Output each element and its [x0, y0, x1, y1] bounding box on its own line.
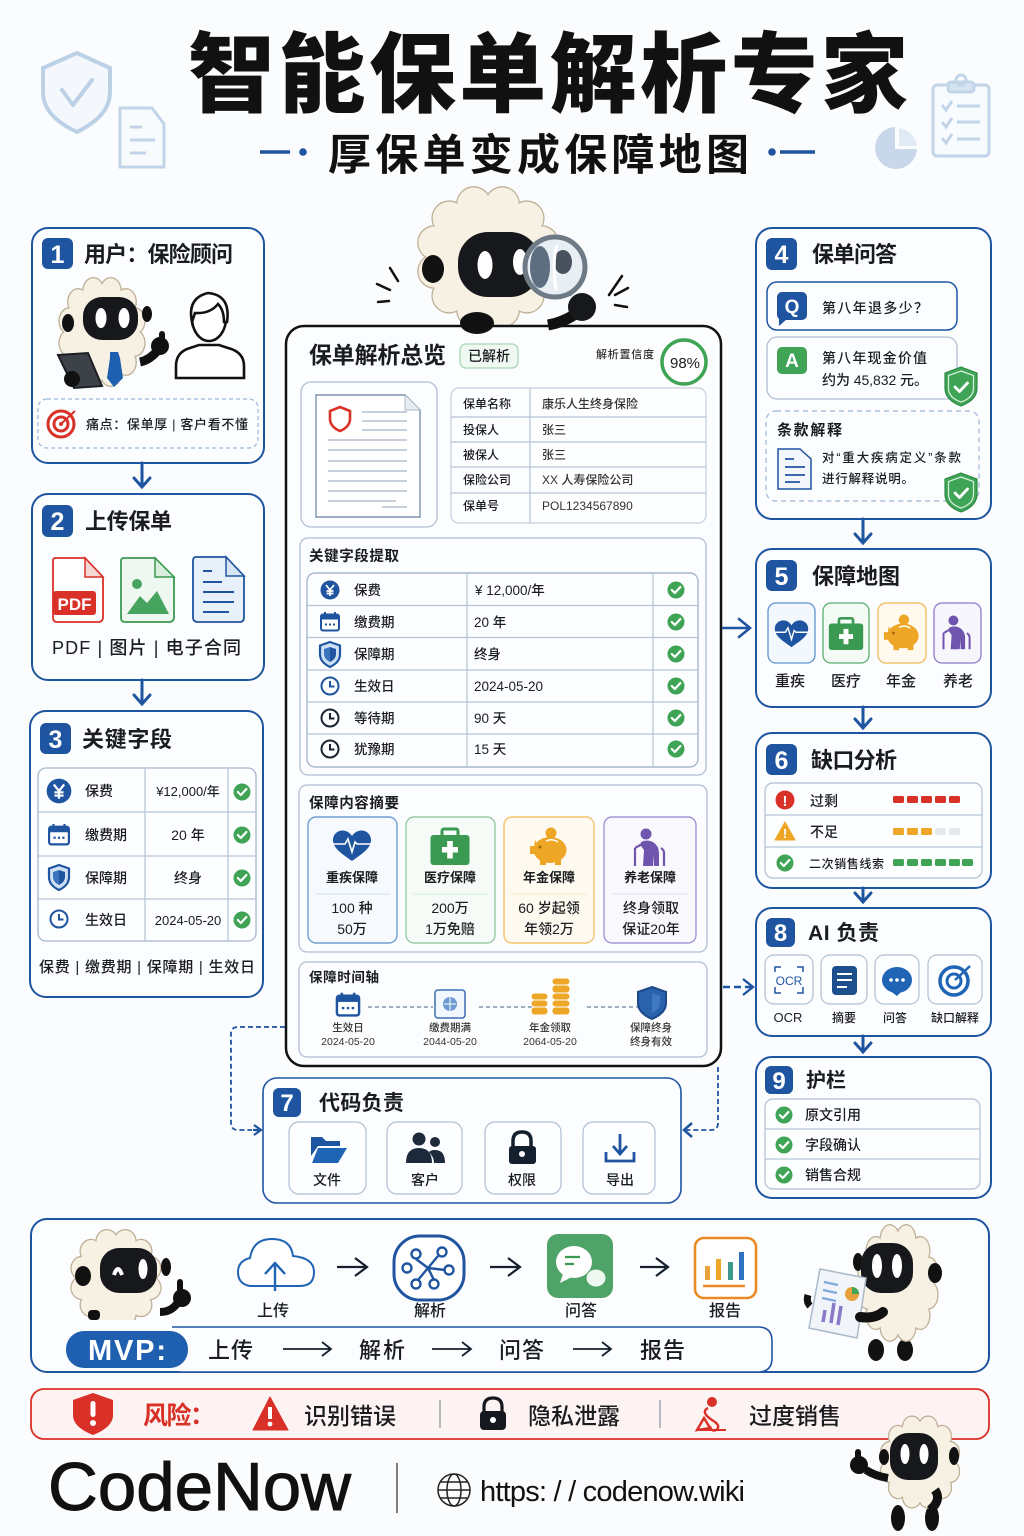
sub-panel: coverage summary: 保障内容摘要: [309, 794, 399, 812]
tile: permissions: [485, 1122, 561, 1194]
risk: privacy leak: [480, 1398, 620, 1430]
subtitle: 厚保单变成保障地图: [328, 132, 749, 180]
question bubble: 第八年退多少？: [822, 300, 928, 316]
icon: image file: [121, 558, 174, 622]
heading 5: 保障地图: [812, 564, 900, 589]
label Q&A: 问答: [565, 1302, 597, 1320]
panel: policy overview: [286, 326, 721, 1066]
sub-panel: coverage summary: [299, 785, 707, 952]
sub-panel: key field extraction: ¥ 12,000/年: [474, 582, 545, 598]
sub-panel: key field extraction: 90 天: [474, 711, 507, 726]
card: medical: [406, 817, 495, 943]
sub-panel: key field extraction: 生效日: [354, 678, 394, 694]
answer bubble: A: [785, 351, 799, 372]
card: critical illness: 50万: [337, 921, 367, 937]
status badge: [460, 344, 518, 368]
title: 智能保单解析专家: [188, 27, 908, 124]
policy info table: POL1234567890: [542, 499, 633, 513]
heading 9: 护栏: [806, 1069, 846, 1092]
arrow: [337, 1258, 367, 1276]
sub-panel: coverage timeline: 保障终身: [630, 1021, 672, 1034]
decorative header icon: document: [120, 108, 164, 167]
dashed connector overview to panel 7 left: [231, 1027, 285, 1135]
arrow: [490, 1258, 520, 1276]
question bubble: [767, 282, 957, 330]
card: annuity: 年金保障: [523, 870, 575, 885]
heading 8: AI 负责: [808, 922, 879, 945]
MVP pill: MVP:: [88, 1335, 166, 1367]
arrow head into panel 7: [684, 1123, 692, 1137]
panel 8: AI responsibilities: [756, 908, 991, 1036]
tile: export: [583, 1122, 655, 1194]
badge 2: 2: [51, 508, 64, 536]
sub-panel: coverage timeline: [299, 962, 707, 1057]
sub-panel: key field extraction: 保障期: [354, 646, 394, 662]
AI tile labels: 摘要: [832, 1010, 856, 1025]
decorative header icon: pie chart: [875, 127, 917, 169]
AI tile labels: [774, 1010, 979, 1025]
answer bubble: 第八年现金价值: [822, 350, 927, 366]
confidence label: 解析置信度: [596, 347, 654, 361]
heading 6: 缺口分析: [811, 748, 897, 773]
tile: chat: [875, 955, 919, 1004]
badge 5: [766, 560, 797, 591]
card: annuity: 60 岁起领: [518, 900, 580, 916]
arrow 6 to 8: [855, 888, 871, 902]
question bubble: Q: [785, 297, 799, 318]
gap table: 不足: [810, 824, 838, 840]
pain point callout: 痛点：保单厚 | 客户看不懂: [86, 417, 248, 432]
label parse: 解析: [414, 1302, 446, 1320]
badge 1: [42, 238, 73, 269]
card: medical: 200万: [431, 900, 469, 916]
sub-panel: coverage timeline: 保障时间轴: [309, 969, 379, 985]
badge 7: [273, 1088, 301, 1117]
tile: elderly care: [934, 603, 981, 663]
mascot: holding report: [807, 1225, 942, 1361]
key fields summary: 保费 | 缴费期 | 保障期 | 生效日: [39, 958, 255, 976]
badge 8: [766, 918, 795, 947]
badge 9: [765, 1066, 793, 1095]
badge 8: 8: [774, 920, 787, 947]
coverage map labels: 医疗: [831, 673, 861, 690]
risk heading: 风险：: [143, 1402, 215, 1430]
coverage map labels: [775, 672, 973, 690]
card: critical illness: 重疾保障: [326, 870, 378, 885]
MVP flow strip: 问答: [499, 1338, 544, 1363]
icon: PDF file: [53, 558, 103, 622]
sub-panel: key field extraction: 缴费期: [354, 614, 394, 630]
badge 9: 9: [772, 1068, 786, 1095]
icon: upload cloud: [238, 1239, 314, 1291]
tile: files: 文件: [313, 1172, 341, 1188]
sub-panel: key field extraction: 等待期: [354, 710, 394, 726]
sub-panel: key field extraction: 关键字段提取: [309, 547, 400, 565]
separator: [396, 1463, 398, 1513]
MVP flow strip: 解析: [359, 1338, 405, 1363]
policy info table: 康乐人生终身保险: [542, 396, 638, 411]
heading 7: 代码负责: [319, 1092, 404, 1115]
icon: e-contract file: [193, 557, 244, 622]
tile: medical: [823, 603, 869, 663]
AI tile labels: OCR: [774, 1010, 802, 1025]
policy info table: 保单名称: [463, 396, 511, 411]
clause explanation: [766, 411, 979, 512]
tile: OCR: [765, 955, 813, 1004]
panel: MVP flow: [31, 1219, 989, 1372]
card: elderly care: [604, 817, 696, 943]
status badge: 已解析: [468, 348, 510, 364]
AI tile labels: 缺口解释: [931, 1010, 979, 1025]
tile: files: [289, 1122, 366, 1194]
arrow: [640, 1258, 668, 1276]
icon: globe: [438, 1474, 470, 1506]
gap table: 过剩: [810, 793, 838, 809]
card: annuity: 年领2万: [524, 921, 574, 937]
key fields table: 生效日: [85, 912, 127, 928]
risk: misidentification: [253, 1397, 396, 1430]
key fields table: 终身: [174, 870, 202, 886]
brand: CodeNow: CodeNow: [48, 1449, 352, 1525]
policy info table: 被保人: [463, 447, 499, 462]
tile: export: 导出: [606, 1172, 634, 1188]
badge 2: [42, 505, 73, 537]
tile: critical illness: [768, 603, 815, 663]
badge 6: [766, 744, 797, 775]
gap table: [765, 783, 982, 878]
sub-panel: coverage timeline: 生效日: [332, 1021, 364, 1034]
risk: privacy leak: 隐私泄露: [528, 1403, 620, 1429]
key fields table: 2024-05-20: [155, 913, 221, 928]
sub-panel: coverage timeline: 2044-05-20: [423, 1036, 477, 1048]
timeline icon: shield: [638, 987, 666, 1019]
label report: 报告: [709, 1302, 741, 1320]
dashed arrow overview to panel 8: [723, 979, 753, 995]
sub-panel: key field extraction: 15 天: [474, 742, 507, 757]
gap table: !: [783, 826, 787, 841]
MVP flow strip: 上传: [208, 1338, 253, 1363]
MVP pill: [66, 1331, 188, 1368]
risk: overselling: 过度销售: [749, 1403, 841, 1429]
sub-panel: key field extraction: 犹豫期: [354, 742, 394, 757]
key fields table: ¥12,000/年: [155, 784, 220, 799]
guardrail list: [765, 1099, 980, 1189]
tile: OCR: OCR: [776, 974, 803, 988]
panel: risks: [31, 1389, 989, 1439]
badge 1: 1: [51, 241, 65, 269]
sub-panel: coverage timeline: 年金领取: [529, 1021, 571, 1034]
tile: annuity: [878, 603, 926, 663]
arrow 8 to 9: [855, 1036, 871, 1052]
policy info table: 保险公司: [463, 473, 511, 487]
decorative header icon: shield: [43, 53, 110, 132]
MVP flow strip: 报告: [640, 1338, 685, 1363]
panel 5: coverage map: [756, 549, 991, 707]
policy info table: 投保人: [463, 422, 499, 437]
answer bubble: 约为 45,832 元。: [822, 372, 928, 388]
tile: permissions: 权限: [508, 1172, 536, 1188]
clause explanation: 进行解释说明。: [822, 471, 914, 486]
panel 7: code responsibilities: [263, 1078, 681, 1203]
confidence ring: [662, 340, 706, 384]
clause explanation: 对“重大疾病定义”条款: [822, 450, 961, 465]
policy info table: 张三: [542, 447, 566, 462]
tile: summary: [821, 955, 867, 1004]
policy info table: 保单号: [463, 499, 499, 513]
panel 4: policy Q&A: [756, 228, 991, 519]
coverage map labels: 养老: [943, 672, 973, 690]
key fields table: 保费: [85, 783, 113, 799]
panel 6: gap analysis: [756, 733, 991, 888]
panel 2: upload: [32, 494, 264, 680]
icon: report chart: [695, 1238, 756, 1298]
card: critical illness: [308, 817, 397, 943]
risk: misidentification: 识别错误: [304, 1403, 396, 1429]
policy info table: XX 人寿保险公司: [542, 472, 633, 487]
key fields table: 保障期: [85, 870, 127, 886]
timeline icon: brain tile: [435, 990, 465, 1018]
decorative header icon: clipboard: [933, 75, 989, 156]
badge 7: 7: [280, 1090, 294, 1117]
sub-panel: coverage timeline: 2064-05-20: [523, 1036, 577, 1048]
upload formats: PDF | 图片 | 电子合同: [52, 638, 241, 658]
tile: clients: 客户: [411, 1172, 439, 1188]
arrow 5 to 6: [855, 707, 871, 728]
AI tile labels: 问答: [883, 1010, 907, 1025]
card: medical: 医疗保障: [424, 870, 476, 885]
panel 9: guardrails: [756, 1057, 991, 1198]
sub-panel: coverage timeline: 终身有效: [630, 1035, 672, 1048]
clause explanation: 条款解释: [777, 422, 842, 439]
arrow overview to panel 5: [723, 619, 750, 637]
heading: overview: 保单解析总览: [309, 342, 446, 368]
MVP flow strip: [66, 1327, 772, 1372]
heading 1: 用户：保险顾问: [84, 242, 233, 267]
timeline icon: calendar: [337, 993, 359, 1015]
card: elderly care: 养老保障: [624, 870, 676, 885]
sub-panel: coverage timeline: 2024-05-20: [321, 1036, 375, 1048]
key fields table: [38, 768, 256, 941]
guardrail list: 销售合规: [805, 1167, 861, 1183]
badge 4: 4: [775, 241, 789, 269]
card: critical illness: 100 种: [331, 900, 373, 916]
risk: overselling: [696, 1397, 841, 1430]
sub-panel: coverage timeline: 缴费期满: [429, 1021, 471, 1034]
coverage map labels: 重疾: [775, 672, 805, 690]
key fields table: 缴费期: [85, 827, 127, 843]
badge 5: 5: [775, 563, 789, 591]
card: annuity: [504, 817, 594, 943]
panel 3: key fields: [30, 711, 263, 997]
badge 4: [766, 238, 797, 270]
heading 3: 关键字段: [82, 727, 172, 752]
icon: chat tile: [547, 1234, 613, 1298]
badge 3: [40, 723, 71, 754]
sub-panel: key field extraction: 2024-05-20: [474, 679, 543, 694]
policy info table: 张三: [542, 422, 566, 437]
badge 3: 3: [49, 726, 62, 754]
policy document preview: [301, 382, 437, 527]
guardrail list: 字段确认: [805, 1137, 861, 1153]
mascot with tie and tablet: [58, 278, 169, 388]
sub-panel: key field extraction: 终身: [474, 647, 501, 662]
dashed connector overview to panel 7 right: [686, 1067, 718, 1130]
card: elderly care: 终身领取: [623, 900, 679, 916]
coverage map labels: 年金: [886, 672, 916, 690]
mascot: thumbs up: [71, 1230, 191, 1326]
label upload: 上传: [257, 1302, 289, 1320]
mascot paw and hand holding magnifier: [460, 237, 596, 334]
policy info table: [451, 388, 706, 523]
guardrail list: 原文引用: [805, 1107, 861, 1123]
website url: https: / / codenow.wiki: [480, 1476, 745, 1508]
icon: risk shield: [73, 1393, 113, 1435]
mascot: bottom right: [850, 1416, 960, 1531]
sub-panel: key field extraction: 20 年: [474, 614, 506, 630]
confidence ring: 98%: [670, 355, 700, 372]
sub-panel: key field extraction: [300, 538, 706, 775]
client icon: [176, 293, 244, 378]
panel 1: user: [32, 228, 264, 463]
arrow 2 to 3: [134, 680, 150, 704]
timeline icon: coins: [531, 978, 570, 1015]
card: medical: 1万免赔: [425, 921, 475, 937]
mascot: sheep with magnifier: [377, 187, 628, 327]
icon: parsing nodes: [394, 1236, 464, 1300]
card: elderly care: 保证20年: [622, 921, 680, 937]
badge 6: 6: [775, 747, 788, 775]
icon: PDF file: PDF: [58, 595, 92, 614]
heading 4: 保单问答: [812, 242, 897, 267]
sub-panel: key field extraction: 保费: [354, 583, 381, 598]
key fields table: 20 年: [171, 827, 205, 843]
tile: clients: [387, 1122, 462, 1194]
pain point callout: [38, 399, 258, 448]
tile: gap explanation: [928, 955, 982, 1004]
gap table: !: [782, 793, 788, 810]
answer bubble: [767, 337, 977, 406]
gap table: 二次销售线索: [809, 856, 884, 871]
arrow 1 to 2: [134, 463, 150, 487]
heading 2: 上传保单: [85, 509, 172, 534]
arrow 4 to 5: [855, 519, 871, 543]
